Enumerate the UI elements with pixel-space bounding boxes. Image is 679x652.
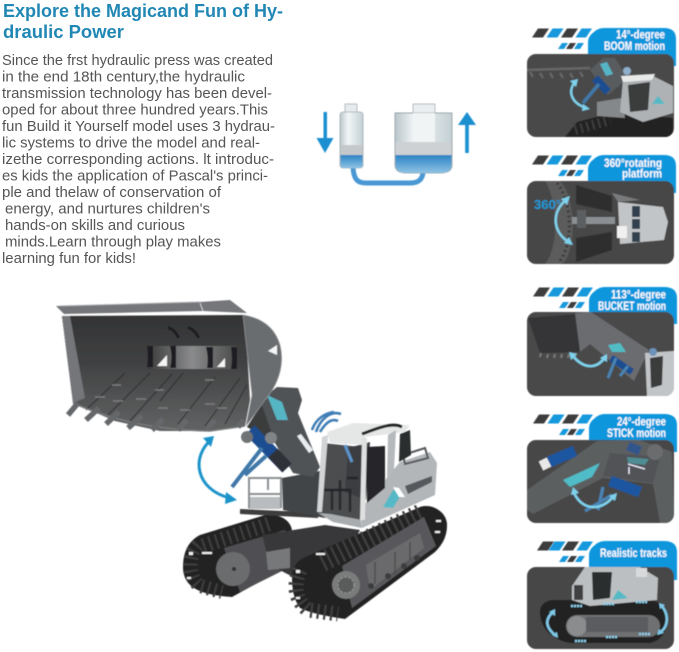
image: top view: [527, 181, 674, 264]
bucket: [56, 300, 282, 431]
image: stick close-up: [527, 440, 674, 523]
360 label: 360°: [534, 197, 561, 212]
front track: [292, 506, 447, 619]
header tab: [589, 541, 677, 580]
blue hydraulic cylinder: [232, 430, 287, 487]
header text: 14°-degree: [616, 28, 665, 42]
text block: hydraulic description: es kids the application of Pascal's princi-: [2, 168, 268, 184]
panel: realistic tracks: [527, 541, 677, 649]
bucket side plate: [243, 315, 282, 426]
large cylinder: [395, 104, 452, 173]
title: draulic Power: [3, 22, 124, 42]
stripes: [533, 414, 593, 435]
text block: hydraulic description: hands-on skills and curious: [5, 217, 185, 234]
panel: stick motion: [527, 414, 677, 523]
header text: 360°rotating: [604, 156, 662, 170]
header text: [604, 156, 662, 180]
bucket interior: [62, 315, 250, 431]
text block: hydraulic description: energy, and nurtures children's: [5, 200, 210, 218]
operator cab: [317, 423, 411, 520]
panel: bucket motion: [527, 287, 677, 396]
rear platform with railing: [240, 478, 318, 518]
stripes: [532, 28, 592, 49]
text block: hydraulic description: in the end 18th century,the hydraulic: [2, 68, 245, 86]
text block: hydraulic description: lic systems to drive the model and real-: [2, 134, 260, 152]
illustration: excavator with bucket: [56, 300, 447, 619]
stripes: [537, 542, 593, 562]
track direction arrows: [571, 602, 651, 641]
diagram: hydraulic press: [316, 104, 476, 183]
text block: hydraulic description: izethe corresponding actions. lt introduc-: [2, 151, 274, 168]
panel: 360 rotating platform: [527, 155, 676, 264]
header text: 24°-degree: [617, 414, 666, 428]
tube connecting cylinders: [353, 168, 423, 183]
rear track: [183, 515, 292, 597]
text block: hydraulic description: transmission technology has been devel-: [2, 85, 272, 102]
header text: [607, 414, 666, 440]
undercarriage: [262, 525, 360, 578]
stripes: [532, 156, 592, 176]
bucket top lip: [56, 300, 247, 314]
machine body: [282, 448, 437, 528]
header text: 113°-degree: [611, 288, 666, 302]
bucket teeth: [68, 403, 244, 430]
image: tracks close-up: [527, 567, 674, 649]
header tab: [588, 155, 676, 193]
header text: [604, 28, 665, 53]
text block: hydraulic description: ple and thelaw of conservation of: [2, 184, 222, 201]
stripes: [533, 288, 593, 308]
motion arrow: [199, 436, 237, 504]
image: bucket close-up: [527, 312, 674, 396]
header tab: [588, 28, 676, 66]
header tab: [589, 414, 677, 452]
header tab: [589, 287, 677, 324]
text block: hydraulic description: learning fun for kids!: [2, 250, 136, 267]
panel: boom motion: [527, 28, 676, 137]
small cylinder: [340, 104, 363, 168]
text block: hydraulic description: Since the frst hydraulic press was created: [2, 52, 273, 69]
image: boom close-up: [527, 54, 674, 137]
boom arm: [247, 387, 341, 477]
header text: platform: [622, 166, 662, 180]
title: [3, 1, 283, 42]
text block: hydraulic description: minds.Learn through play makes: [5, 234, 221, 250]
icon: up arrow: [458, 112, 476, 153]
text block: hydraulic description: fun Build it Yourself model uses 3 hydrau-: [2, 118, 275, 135]
icon: down arrow: [316, 112, 334, 153]
header text: [598, 288, 666, 313]
text block: hydraulic description: oped for about three hundred years.This: [2, 102, 268, 118]
text block: hydraulic description: [2, 52, 275, 267]
title: Explore the Magicand Fun of Hy-: [3, 1, 283, 21]
